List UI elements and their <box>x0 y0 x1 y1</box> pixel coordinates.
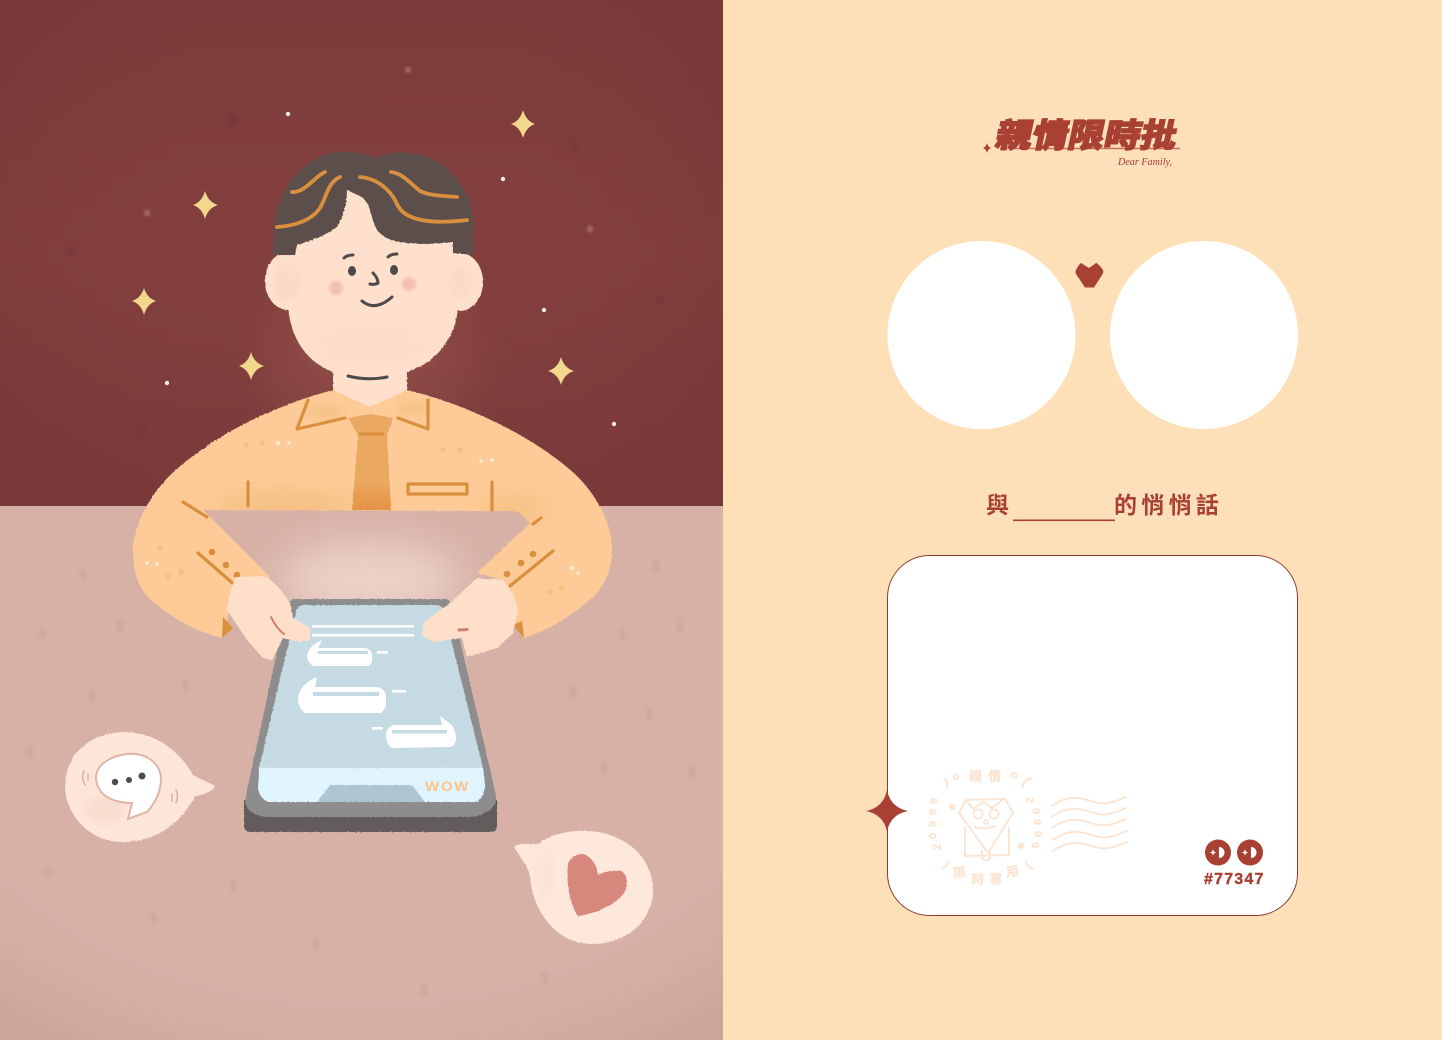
postmark stamp: 9 <box>928 821 940 827</box>
shirt details <box>183 400 553 587</box>
heading: 與 ___ 的悄悄話: 的悄悄話 <box>1114 492 1223 518</box>
logo: 親情限時批: Dear Family, <box>1117 157 1172 168</box>
badge icons: two round faces <box>1205 840 1263 866</box>
figure: man with shirt and tie <box>133 152 612 638</box>
shirt shading <box>145 400 580 595</box>
postmark stamp: 9 <box>1030 819 1042 825</box>
head <box>265 190 483 407</box>
photo circle: left <box>888 241 1076 429</box>
icon: small heart <box>1076 263 1103 288</box>
panel: right page background <box>723 0 1442 1040</box>
panel: illustration background <box>0 0 723 1040</box>
postmark stamp: 限 <box>952 864 967 881</box>
postmark stamp: 9 <box>928 798 940 804</box>
chat lines and bubbles <box>298 625 456 748</box>
postmark wavy lines <box>1052 797 1127 851</box>
necktie <box>348 414 393 510</box>
postmark stamp: 情 <box>988 769 1001 784</box>
postmark stamp: 專 <box>989 872 1003 887</box>
hair <box>273 152 473 255</box>
postmark stamp: 0 <box>928 833 940 839</box>
postmark stamp: 時 <box>971 872 985 887</box>
hands <box>227 576 518 660</box>
tablet <box>244 599 497 832</box>
postmark stamp: 親 <box>969 769 982 784</box>
speech bubble: chat <box>65 732 215 842</box>
heading: 與 ___ 的悄悄話 <box>986 492 1223 521</box>
face features <box>329 254 416 379</box>
postmark stamp <box>928 769 1044 887</box>
speech bubble: heart <box>514 831 653 944</box>
hair strands <box>277 172 467 227</box>
logo: 親情限時批 <box>983 118 1181 168</box>
postmark stamp: 0 <box>1030 808 1042 814</box>
heading: 與 ___ 的悄悄話: 與 <box>986 492 1009 518</box>
icon: heart <box>567 854 627 916</box>
postmark stamp: 2 <box>1024 797 1036 803</box>
postmark stamp: 9 <box>1032 831 1044 837</box>
shirt body <box>133 390 612 638</box>
postmark stamp: 2 <box>932 844 944 850</box>
postmark stamp: 9 <box>1028 842 1040 848</box>
icon: sparkle stars and dots <box>132 67 616 426</box>
logo: 親情限時批: 親情限時批 <box>992 118 1181 155</box>
code: #77347: #77347 <box>1204 871 1265 888</box>
icon: four-point star <box>866 790 908 832</box>
photo circle: right <box>1110 241 1298 429</box>
postmark stamp: 9 <box>928 809 940 815</box>
label: WOW: WOW <box>425 778 470 794</box>
panel: message card <box>888 556 1298 916</box>
postmark stamp: 用 <box>1005 863 1020 880</box>
